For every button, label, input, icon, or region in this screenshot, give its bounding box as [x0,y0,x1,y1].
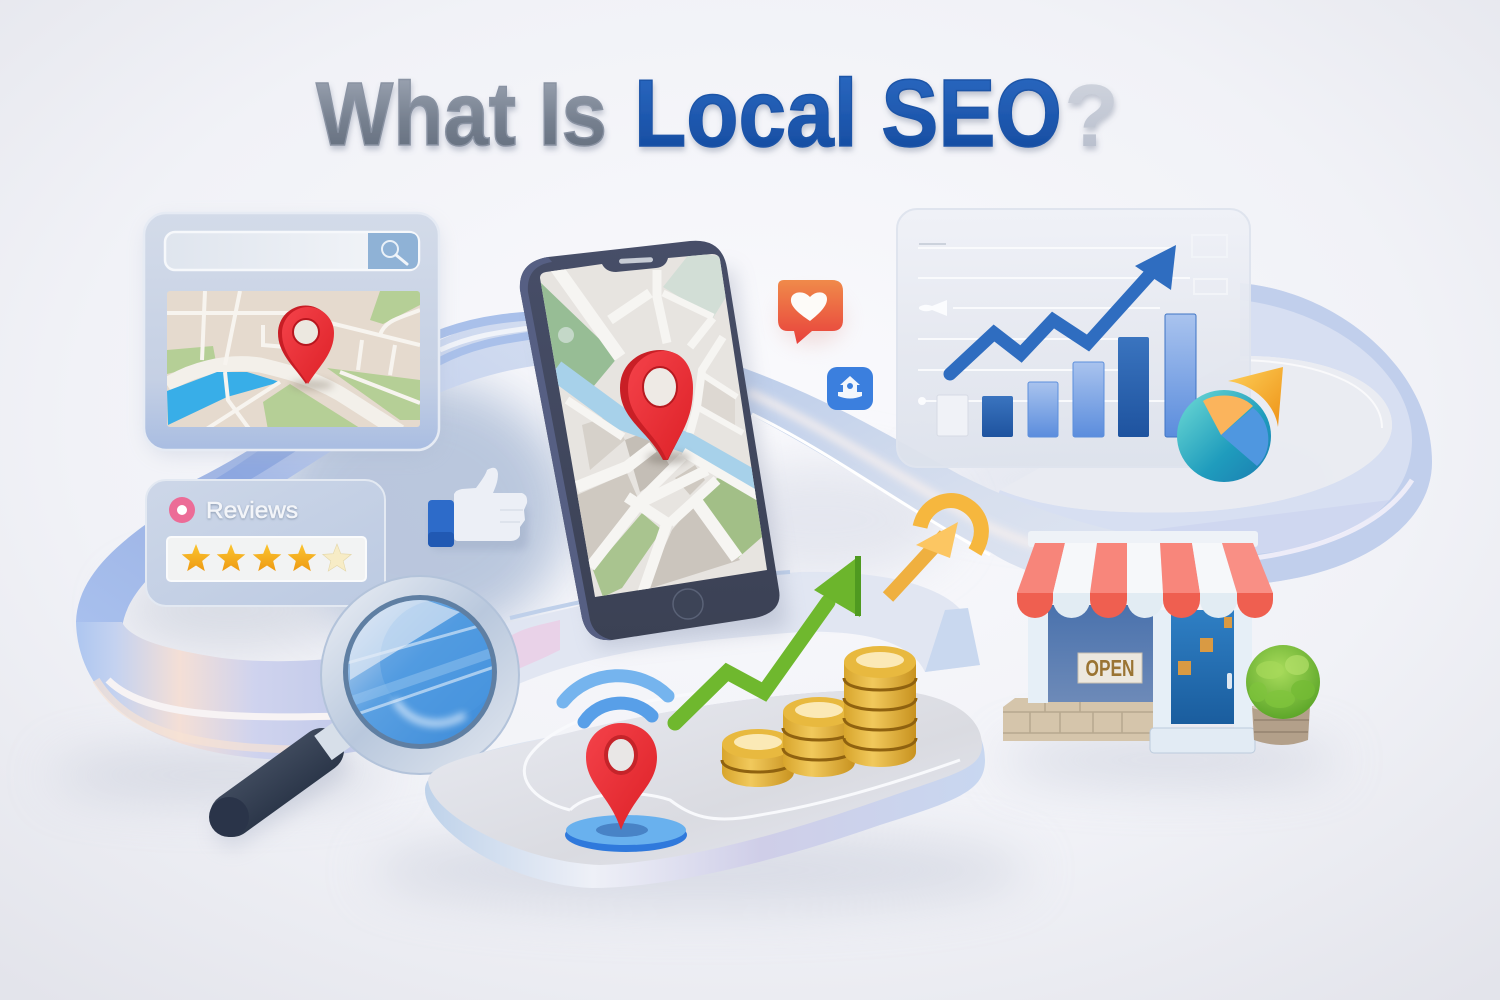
plant pot [1252,703,1310,745]
soft shadow under ribbon and tray [50,380,1340,910]
handle [209,730,348,837]
speaker [619,257,653,264]
panel: search and map [144,213,439,454]
icon: pink dot [169,497,195,523]
plant [1246,645,1320,719]
icon: blue app badge [827,367,873,410]
icon: map pin [278,306,334,390]
search bar [165,232,419,270]
icon: heart speech bubble [778,280,844,344]
phone map screen [540,254,767,597]
star rating [167,537,366,581]
lens [321,576,519,774]
green growth arrow [675,556,861,723]
chart grid lines [918,235,1227,401]
roof beam [1028,531,1258,547]
shop door [1170,610,1234,724]
title: Local SEO [634,60,1062,167]
shop wall [1048,605,1154,702]
small chart markers [918,243,947,405]
tray edge [425,690,985,888]
ribbon: lower-left loop [76,622,400,760]
home button [673,589,703,619]
glass tray [425,690,985,888]
coin stack medium [783,697,855,777]
smartphone [520,241,788,648]
magnifying glass [209,576,519,837]
striped awning [1017,543,1273,618]
icon: wifi signal [563,676,668,722]
brick base [1003,698,1153,741]
bar chart [937,314,1196,437]
title [316,60,1119,167]
storefront [1003,531,1320,753]
panel: growth chart [897,209,1250,467]
reviews label: Reviews [206,497,298,523]
phone side edge [520,257,612,640]
phone body [520,241,780,640]
icon: location pin on disc [565,723,687,852]
title: ? [1064,66,1119,165]
ribbon: right loop [980,283,1432,586]
tray surface [428,690,982,865]
icon: thumbs up [428,468,528,550]
open sign [1078,653,1142,683]
step [1150,728,1255,753]
ribbon: lower glass strand [500,572,980,690]
pillars [1028,610,1252,730]
ribbon: central strand [735,365,1190,590]
ribbon: upper-left strand [76,312,540,628]
title: What Is [316,65,607,165]
icon: pie chart [1177,367,1283,482]
panel: reviews [146,480,385,606]
tray inner channel [524,690,960,819]
blue trend arrow [950,245,1176,374]
coin stack tall [844,646,916,767]
coin stacks [722,646,916,787]
icon: yellow arrow with ring [888,501,981,597]
coin stack small [722,729,794,787]
glass ribbon [76,283,1432,760]
icon: phone map pin [620,350,693,464]
map [167,291,420,432]
open sign: OPEN [1086,655,1134,681]
